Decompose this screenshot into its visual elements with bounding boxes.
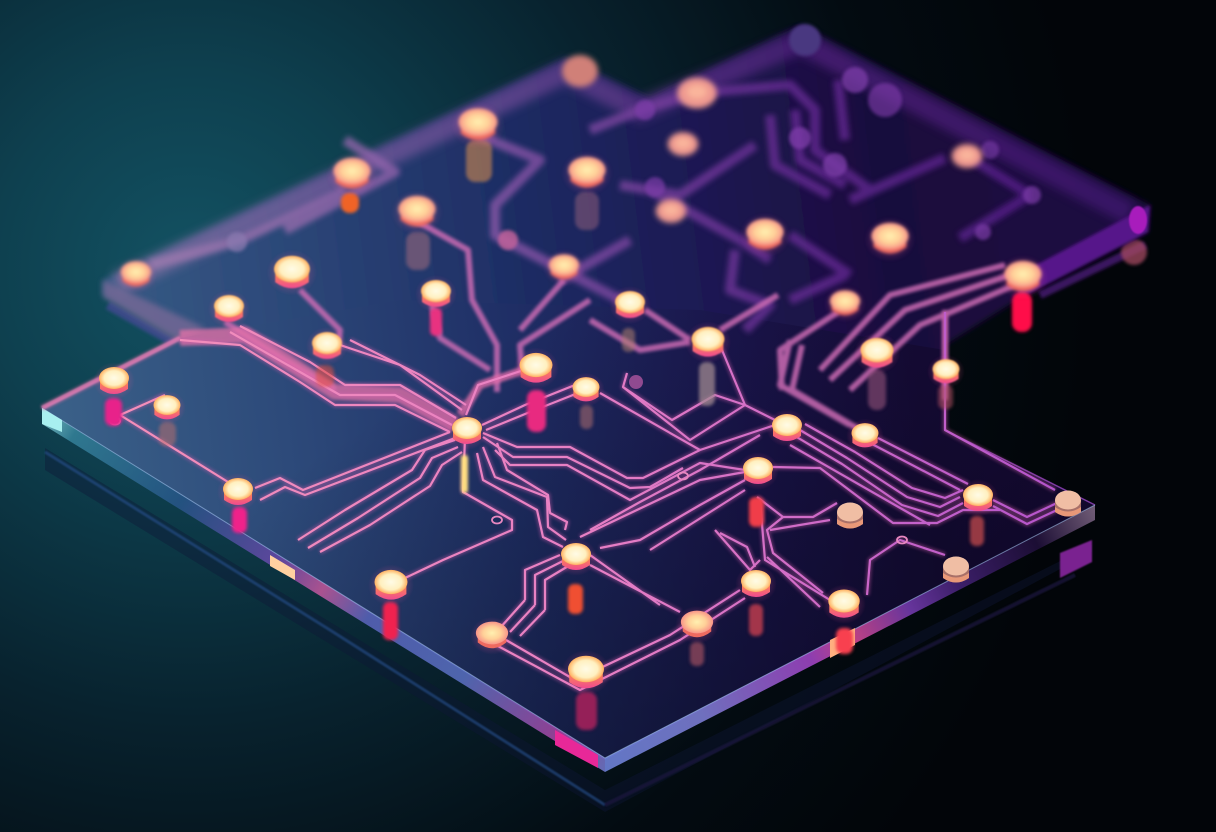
back board layer: [103, 25, 1150, 430]
circuit traces: middle layer: [225, 220, 1015, 430]
board reflection: [45, 239, 1147, 812]
circuit traces: front layer: [120, 312, 1057, 690]
front board layer: [42, 300, 1095, 772]
thick glowing trace bundles: [42, 335, 530, 425]
circuit traces: back layer: [150, 80, 1030, 330]
glowing nodes: soft mid row: [115, 102, 1048, 322]
glowing nodes: sharp front row: [93, 347, 1081, 695]
glowing nodes: near focus row: [208, 250, 965, 389]
circuit traces: front glow: [120, 312, 1057, 690]
reflections under nodes: [105, 140, 1032, 730]
vias: [110, 375, 907, 544]
glowing nodes: blurred back row: [562, 55, 982, 223]
